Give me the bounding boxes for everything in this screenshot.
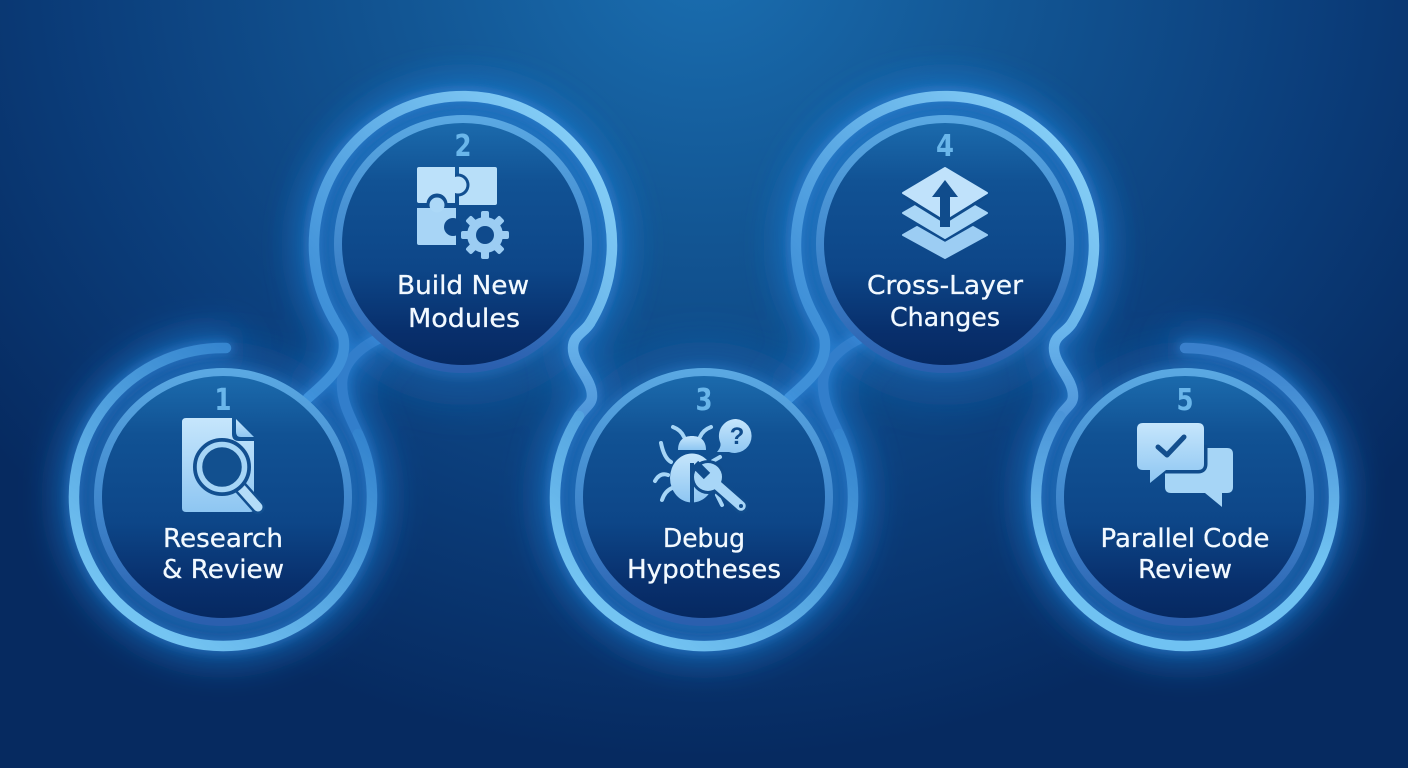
label: Build New bbox=[397, 271, 529, 301]
label: Review bbox=[1138, 555, 1232, 585]
label: Debug bbox=[663, 524, 745, 554]
label: Hypotheses bbox=[627, 555, 781, 585]
step number 1: 1 bbox=[214, 383, 232, 418]
connector: step 2 to step 3 bbox=[573, 323, 592, 416]
label: & Review bbox=[162, 555, 284, 585]
connector: step 1 to step 2 bbox=[342, 339, 378, 434]
connector: step 2 back to step 1 bbox=[308, 318, 344, 398]
icon: bug, wrench and question bubble bbox=[655, 419, 752, 508]
step number 2: 2 bbox=[454, 129, 472, 164]
panel: step 2 Build New Modules bbox=[338, 119, 588, 369]
inner ring and disc bbox=[98, 372, 348, 622]
inner ring and disc bbox=[338, 119, 588, 369]
icon: document with magnifier bbox=[182, 418, 258, 512]
step number 3: 3 bbox=[696, 383, 712, 418]
connectors and outer rings bbox=[74, 96, 1334, 646]
icon: bug, wrench and question bubble: ? bbox=[730, 423, 744, 450]
ring arc: step 5 bbox=[1036, 348, 1334, 646]
label: Research bbox=[163, 524, 283, 554]
inner ring and disc bbox=[1060, 372, 1310, 622]
connector: step 4 to step 5 bbox=[1054, 323, 1073, 416]
panel: step 1 Research & Review bbox=[98, 372, 348, 622]
inner ring and disc bbox=[579, 372, 829, 622]
soft halo behind circles bbox=[68, 85, 1340, 652]
label: Parallel Code bbox=[1100, 524, 1270, 554]
glow behind rings bbox=[74, 96, 1334, 646]
label: Modules bbox=[408, 304, 520, 334]
icon: chat bubbles with check bbox=[1137, 423, 1233, 507]
connector: step 3 to step 4 bbox=[823, 339, 859, 434]
ring arc: step 1 bbox=[74, 348, 372, 646]
step number 5: 5 bbox=[1176, 383, 1194, 418]
inner ring and disc bbox=[820, 119, 1070, 369]
icon: puzzle and gear bbox=[417, 167, 509, 259]
step number 4: 4 bbox=[936, 129, 954, 164]
connector: step 4 back to step 3 bbox=[789, 318, 825, 398]
label: Cross-Layer bbox=[867, 271, 1023, 301]
label: Changes bbox=[890, 303, 1000, 333]
icon: stacked layers with up arrow bbox=[903, 168, 987, 258]
panel: step 5 Parallel Code Review bbox=[1060, 372, 1310, 622]
inner ring glow bbox=[95, 116, 1313, 625]
ring arc: step 4 bbox=[796, 96, 1094, 323]
panel: step 3 Debug Hypotheses bbox=[579, 372, 829, 622]
ring arc: step 3 bbox=[555, 416, 853, 646]
panel: step 4 Cross-Layer Changes bbox=[820, 119, 1070, 369]
ring arc: step 2 bbox=[314, 96, 612, 323]
